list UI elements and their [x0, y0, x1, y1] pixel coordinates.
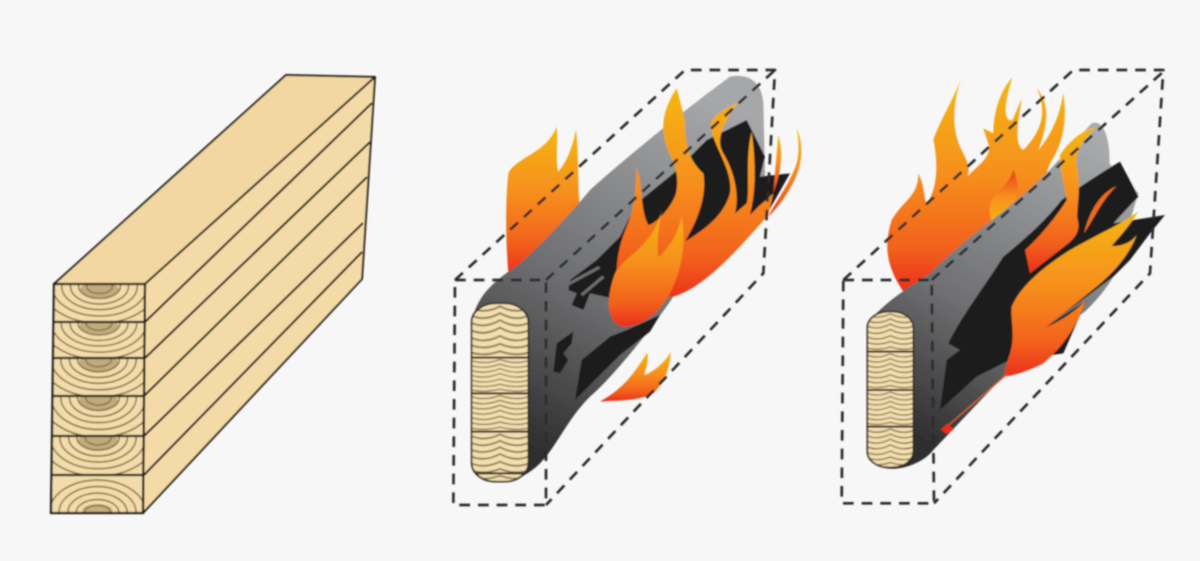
- dashed outline of original section: [842, 70, 1163, 503]
- end grain: [867, 312, 913, 467]
- side face of beam: [143, 77, 375, 513]
- back flames: [887, 77, 1065, 292]
- end grain: [472, 303, 528, 482]
- front flame: [609, 210, 684, 327]
- panel: intact laminated beam: [40, 75, 375, 545]
- lower flame: [600, 352, 671, 402]
- ember dot: [941, 424, 954, 434]
- dashed outline of original section: [453, 70, 775, 505]
- charred beam body: [472, 76, 765, 483]
- top face of beam: [54, 75, 375, 284]
- inner flame: [989, 169, 1018, 224]
- gold flame over body: [1025, 127, 1097, 273]
- char patches: [553, 120, 790, 400]
- front flame: [1003, 212, 1138, 377]
- wavy flames: [617, 88, 801, 300]
- char patch: [940, 162, 1165, 410]
- ember line: [945, 374, 1007, 428]
- back flame: [506, 127, 582, 273]
- charred beam body: [867, 123, 1138, 469]
- illustration: three timber beam stages: [48, 68, 1166, 516]
- panel: beam with partial char: [453, 70, 801, 505]
- wisp flame: [1084, 186, 1117, 233]
- end grain boards: [40, 250, 157, 545]
- gray slashes in char: [568, 267, 603, 295]
- lamination lines on side face: [144, 103, 372, 475]
- panel: beam with heavy char: [842, 70, 1165, 503]
